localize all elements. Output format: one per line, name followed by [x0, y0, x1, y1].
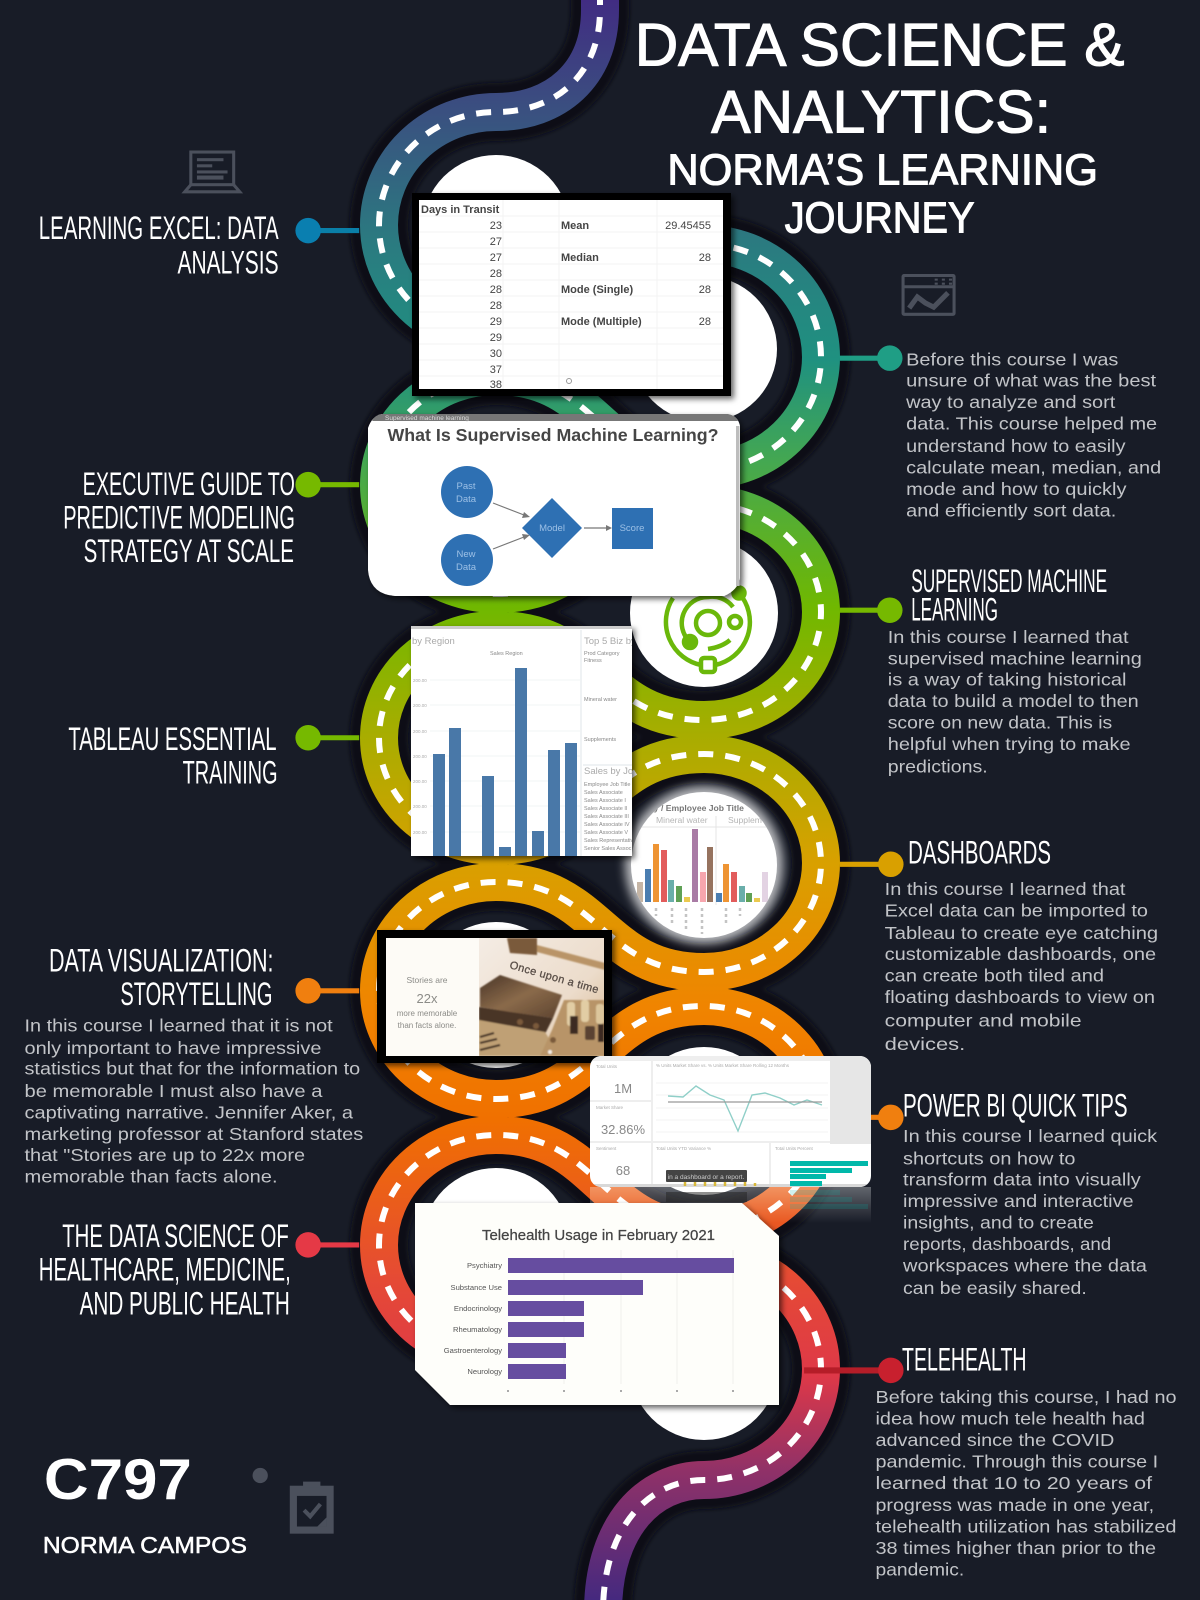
image: storytelling slide: Stories are	[406, 975, 448, 985]
heading: telehealth: TELEHEALTH	[902, 1340, 1027, 1377]
image: storytelling slide: Once upon a time	[508, 959, 600, 996]
text: storytelling: statistics but that for the information to	[24, 1058, 360, 1078]
dashboards circle chart	[625, 786, 783, 944]
text: before this course: mode and how to quickly	[906, 479, 1127, 499]
image: excel statistics table: 28	[699, 252, 711, 264]
text: supervised machine learning: score on new data. This is	[888, 713, 1112, 733]
text: dashboards: floating dashboards to view on	[885, 987, 1155, 1007]
image: excel statistics table: 38	[490, 379, 502, 391]
image: power bi dashboard: in a dashboard or a report.	[668, 1174, 744, 1181]
text: supervised machine learning: supervised machine learning	[888, 648, 1142, 668]
text: before this course	[905, 349, 1161, 520]
image: power bi dashboard: Total Units YTD Variance %	[656, 1146, 711, 1151]
image: excel statistics table: 28	[699, 316, 711, 328]
heading: executive guide: PREDICTIVE MODELING	[63, 499, 295, 536]
text: storytelling: that "Stories are up to 22x more	[24, 1145, 305, 1165]
text: dashboards: Excel data can be imported to	[885, 900, 1148, 920]
text: power bi: can be easily shared.	[903, 1278, 1087, 1298]
image: excel statistics table: 28	[490, 300, 502, 312]
image: tableau bar chart dashboard: Sales Associate V	[584, 830, 628, 836]
image: tableau bar chart dashboard: 200.00	[413, 703, 427, 708]
image: excel statistics table: 23	[490, 220, 502, 232]
text: telehealth: pandemic. Through this course I	[876, 1451, 1158, 1471]
image: power bi dashboard	[590, 1056, 871, 1223]
white milestone circles	[422, 155, 778, 1440]
text: supervised machine learning: data to build a model to then	[888, 691, 1139, 711]
text: telehealth: pandemic.	[876, 1559, 964, 1579]
text: supervised machine learning: is a way of taking historical	[888, 670, 1127, 690]
text: power bi: workspaces where the data	[902, 1255, 1147, 1275]
dashboards circle chart: gory / Employee Job Title	[640, 803, 744, 813]
text: storytelling: marketing professor at Stanford states	[24, 1124, 363, 1144]
text: telehealth: advanced since the COVID	[876, 1430, 1114, 1450]
text: power bi: shortcuts on how to	[903, 1148, 1076, 1168]
image: tableau bar chart dashboard: Top 5 Biz by	[584, 636, 636, 647]
image: excel statistics table: Median	[561, 252, 599, 264]
text: before this course: understand how to easily	[906, 436, 1126, 456]
image: tableau bar chart dashboard: Mineral water	[584, 697, 617, 703]
text: supervised machine learning: In this course I learned that	[888, 627, 1129, 647]
image: tableau bar chart dashboard: 200.00	[413, 754, 427, 759]
image: storytelling slide: than facts alone.	[398, 1021, 456, 1030]
text: dashboards: In this course I learned that	[885, 879, 1126, 899]
text: power bi: transform data into visually	[903, 1170, 1141, 1190]
text: storytelling: captivating narrative. Jennifer Aker, a	[24, 1102, 353, 1122]
text: storytelling: memorable than facts alone.	[24, 1167, 278, 1187]
image: excel statistics table: 28	[490, 268, 502, 280]
image: tableau bar chart dashboard: Sales Associate I	[584, 798, 626, 804]
text: telehealth: idea how much tele health had	[876, 1408, 1145, 1428]
heading: executive guide: EXECUTIVE GUIDE TO	[83, 465, 295, 502]
author name: NORMA CAMPOS	[43, 1532, 247, 1558]
text: supervised machine learning: helpful when trying to make	[888, 734, 1131, 754]
decorative dot	[253, 1468, 268, 1483]
image: tableau bar chart dashboard: Prod Category	[584, 651, 620, 657]
text: dashboards: customizable dashboards, one	[885, 944, 1156, 964]
image: excel statistics table: 27	[490, 236, 502, 248]
image: excel statistics table: 29	[490, 332, 502, 344]
image: power bi dashboard: 1M	[614, 1081, 632, 1096]
image: supervised machine learning slide: Model	[539, 523, 565, 534]
text: telehealth: Before taking this course, I had no	[876, 1387, 1177, 1407]
dashboards circle chart: Supplem	[728, 815, 762, 825]
marker: tableau	[295, 725, 359, 751]
image: telehealth usage bar chart	[415, 1203, 779, 1405]
image: power bi dashboard: Market Share	[596, 1105, 624, 1110]
text: dashboards: devices.	[885, 1034, 965, 1054]
heading: data science of healthcare: THE DATA SCIENCE OF	[62, 1217, 289, 1254]
image: storytelling slide: more memorable	[397, 1009, 458, 1018]
text: telehealth: 38 times higher than prior to the	[876, 1538, 1156, 1558]
image: supervised machine learning slide: New	[456, 549, 476, 560]
image: power bi dashboard: Sentiment	[596, 1146, 617, 1151]
image: excel statistics table: Days in Transit	[421, 204, 500, 216]
text: power bi: reports, dashboards, and	[903, 1234, 1111, 1254]
image: telehealth usage bar chart: Neurology	[467, 1367, 502, 1376]
heading: data visualization storytelling: DATA VISUALIZATION:	[49, 941, 273, 978]
marker: before this course	[840, 345, 903, 371]
heading: data science of healthcare	[39, 1217, 291, 1321]
image: tableau bar chart dashboard: 200.00	[413, 678, 427, 683]
text: before this course: Before this course I was	[906, 349, 1118, 369]
heading: tableau essential training	[68, 720, 278, 791]
image: tableau bar chart dashboard: Sales Associate IV	[584, 822, 630, 828]
text: dashboards: can create both tiled and	[885, 966, 1104, 986]
winding road	[379, 0, 821, 1600]
heading: supervised machine learning	[911, 562, 1107, 627]
image: tableau bar chart dashboard: Sales Region	[490, 651, 523, 657]
image: tableau bar chart dashboard: Supplements	[584, 737, 616, 743]
image: telehealth usage bar chart: Endocrinology	[454, 1304, 502, 1313]
heading: tableau essential training: TRAINING	[183, 754, 278, 791]
image: telehealth usage bar chart: Psychiatry	[467, 1261, 502, 1270]
text: dashboards: computer and mobile	[885, 1011, 1082, 1031]
heading: dashboards: DASHBOARDS	[908, 833, 1051, 870]
heading: data visualization storytelling: STORYTELLING	[120, 975, 272, 1012]
heading: supervised machine learning: LEARNING	[911, 590, 998, 627]
image: telehealth usage bar chart: Telehealth Usage in February 2021	[482, 1227, 715, 1244]
marker: learning excel	[295, 218, 359, 243]
image: excel statistics table: 28	[490, 284, 502, 296]
marker: dashboards	[840, 852, 904, 877]
text: power bi: impressive and interactive	[903, 1191, 1134, 1211]
title: DATA SCIENCE &	[635, 11, 1124, 78]
heading: executive guide	[63, 465, 295, 569]
image: tableau bar chart dashboard: Employee Job Title	[584, 782, 630, 788]
icon: clipboard checklist	[290, 1482, 334, 1534]
text: storytelling: only important to have impressive	[24, 1038, 321, 1058]
marker: telehealth	[804, 1358, 904, 1383]
image: supervised machine learning slide: What Is Supervised Machine Learning?	[388, 425, 718, 445]
text: storytelling: In this course I learned that it is not	[24, 1016, 333, 1036]
image: power bi dashboard: Total Units	[596, 1064, 618, 1069]
text: power bi: In this course I learned quick	[903, 1126, 1157, 1146]
image: tableau bar chart dashboard: Sales Associate II	[584, 806, 628, 812]
text: telehealth: telehealth utilization has stabilized	[876, 1517, 1177, 1537]
course code: C797	[44, 1448, 192, 1512]
heading: learning excel: ANALYSIS	[178, 243, 279, 280]
image: tableau bar chart dashboard: Sales Associate III	[584, 814, 629, 820]
heading: learning excel	[39, 209, 279, 280]
dashboards circle chart: Mineral water	[656, 815, 708, 825]
text: dashboards: Tableau to create eye catching	[885, 923, 1158, 943]
icon: chart window	[903, 276, 954, 314]
title	[635, 11, 1124, 243]
image: excel statistics table: 29.45455	[665, 220, 711, 232]
title: JOURNEY	[785, 194, 974, 243]
image: power bi dashboard: Total Units Percent	[775, 1146, 814, 1151]
image: tableau bar chart dashboard: 200.00	[413, 830, 427, 835]
marker: predictive modeling	[295, 472, 359, 497]
text: power bi	[902, 1126, 1157, 1298]
text: before this course: calculate mean, median, and	[906, 457, 1161, 477]
heading: learning excel: LEARNING EXCEL: DATA	[39, 209, 279, 246]
icon: laptop	[185, 152, 240, 192]
text: dashboards	[885, 879, 1158, 1054]
image: tableau bar chart dashboard: Sales Representative	[584, 838, 636, 844]
marker: supervised machine learning	[840, 597, 903, 623]
text: supervised machine learning: predictions.	[888, 756, 988, 776]
icon: supervised learning orbit	[666, 588, 750, 672]
marker: power bi	[840, 1105, 904, 1130]
image: tableau bar chart dashboard: 200.00	[413, 729, 427, 734]
image: tableau bar chart dashboard: 200.00	[413, 804, 427, 809]
heading: tableau essential training: TABLEAU ESSENTIAL	[68, 720, 277, 757]
marker: data science of healthcare	[295, 1232, 359, 1258]
image: power bi dashboard: 68	[616, 1163, 630, 1178]
image: supervised machine learning slide	[368, 414, 740, 596]
connector markers	[295, 218, 904, 1383]
text: before this course: unsure of what was the best	[906, 371, 1156, 391]
image: supervised machine learning slide: Supervised machine learning	[385, 415, 469, 422]
image: supervised machine learning slide: Past	[456, 481, 476, 492]
image: supervised machine learning slide: Score	[620, 523, 644, 534]
image: telehealth usage bar chart: Gastroenterology	[444, 1346, 502, 1355]
image: excel statistics table: 30	[490, 348, 502, 360]
image: tableau bar chart dashboard: Sales Associate	[584, 790, 623, 796]
image: storytelling slide: 22x	[417, 991, 438, 1006]
heading: data visualization storytelling	[49, 941, 273, 1012]
image: excel statistics table: Mode (Single)	[561, 284, 633, 296]
image: tableau bar chart dashboard: Senior Sales Assoc	[584, 846, 632, 852]
text: storytelling	[24, 1016, 363, 1187]
image: tableau bar chart dashboard: 200.00	[413, 779, 427, 784]
image: power bi dashboard: 32.86%	[601, 1122, 645, 1137]
image: excel statistics table: 28	[699, 284, 711, 296]
title: ANALYTICS:	[711, 79, 1051, 146]
text: before this course: data. This course helped me	[906, 414, 1157, 434]
text: before this course: and efficiently sort data.	[906, 500, 1116, 520]
image: excel statistics table: Mean	[561, 220, 589, 232]
image: storytelling slide	[377, 930, 612, 1063]
image: excel statistics table	[412, 193, 731, 396]
heading: data science of healthcare: AND PUBLIC HEALTH	[80, 1284, 290, 1321]
text: telehealth	[876, 1387, 1177, 1579]
image: tableau bar chart dashboard: Fitness	[584, 658, 602, 664]
image: power bi dashboard: % Units Market Share vs. % Units Market Share Rolling 12 Months	[656, 1063, 790, 1068]
image: excel statistics table: 37	[490, 364, 502, 376]
image: tableau bar chart dashboard	[411, 626, 638, 856]
image: telehealth usage bar chart: Rheumatology	[453, 1325, 502, 1334]
text: telehealth: progress was made in one year,	[876, 1495, 1154, 1515]
image: supervised machine learning slide: Data	[456, 494, 477, 505]
heading: executive guide: STRATEGY AT SCALE	[84, 532, 294, 569]
image: supervised machine learning slide: Data	[456, 562, 477, 573]
image: excel statistics table: 29	[490, 316, 502, 328]
text: supervised machine learning	[888, 627, 1142, 776]
image: excel statistics table: 27	[490, 252, 502, 264]
text: telehealth: learned that 10 to 20 years of	[876, 1473, 1153, 1493]
title: NORMA’S LEARNING	[667, 146, 1098, 195]
image: telehealth usage bar chart: Substance Use	[450, 1283, 502, 1292]
image: tableau bar chart dashboard: by Region	[412, 636, 455, 647]
heading: data science of healthcare: HEALTHCARE, MEDICINE,	[39, 1251, 291, 1288]
image: excel statistics table: Mode (Multiple)	[561, 316, 642, 328]
text: storytelling: be memorable I must also have a	[24, 1081, 322, 1101]
text: before this course: way to analyze and sort	[905, 392, 1115, 412]
marker: data visualization	[295, 978, 359, 1004]
image: tableau bar chart dashboard: Sales by Job	[584, 766, 638, 777]
text: power bi: insights, and to create	[903, 1213, 1094, 1233]
